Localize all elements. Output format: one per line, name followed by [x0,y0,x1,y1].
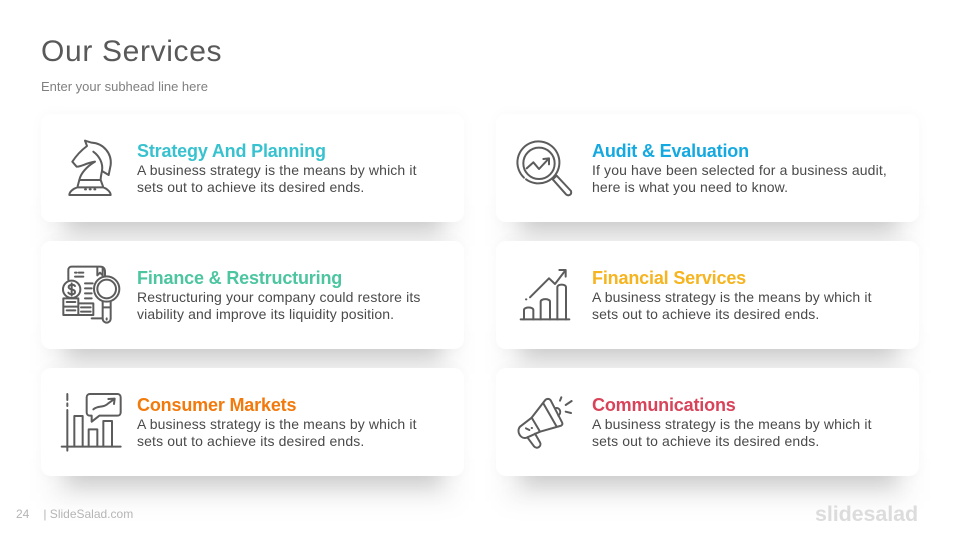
description: A business strategy is the means by which it [592,416,872,432]
description: Restructuring your company could restore its [137,289,421,305]
panel: audit and evaluation [496,114,919,222]
description: here is what you need to know. [592,179,788,195]
description: sets out to achieve its desired ends. [137,433,364,449]
page number and site: 24 | SlideSalad.com [16,507,133,521]
heading: Consumer Markets [137,395,296,415]
description [137,416,417,449]
description [137,289,421,322]
description: sets out to achieve its desired ends. [592,306,819,322]
icon: chart with speech bubble [60,393,122,452]
icon: growth bars [520,269,570,320]
heading: Finance & Restructuring [137,268,342,288]
description: sets out to achieve its desired ends. [592,433,819,449]
icon: chess knight [68,140,112,196]
description: viability and improve its liquidity position. [137,306,394,322]
panel: consumer markets [41,368,464,476]
heading: Communications [592,395,736,415]
description [592,162,887,195]
description [137,162,417,195]
description: sets out to achieve its desired ends. [137,179,364,195]
description: A business strategy is the means by which it [592,289,872,305]
heading: Financial Services [592,268,746,288]
icon: finance document [62,266,120,324]
description: A business strategy is the means by which it [137,162,417,178]
panel: finance and restructuring [41,241,464,349]
panel: communications [496,368,919,476]
logo wordmark: slidesalad [815,502,918,526]
panel: strategy and planning [41,114,464,222]
panel: financial services [496,241,919,349]
description [592,289,872,322]
heading: Audit & Evaluation [592,141,749,161]
heading: Strategy And Planning [137,141,326,161]
subhead: Enter your subhead line here [41,79,208,94]
icon: megaphone [518,396,573,449]
description: If you have been selected for a business audit, [592,162,887,178]
description: A business strategy is the means by which it [137,416,417,432]
title: Our Services [41,35,222,68]
icon: magnifier with chart [516,140,572,196]
description [592,416,872,449]
